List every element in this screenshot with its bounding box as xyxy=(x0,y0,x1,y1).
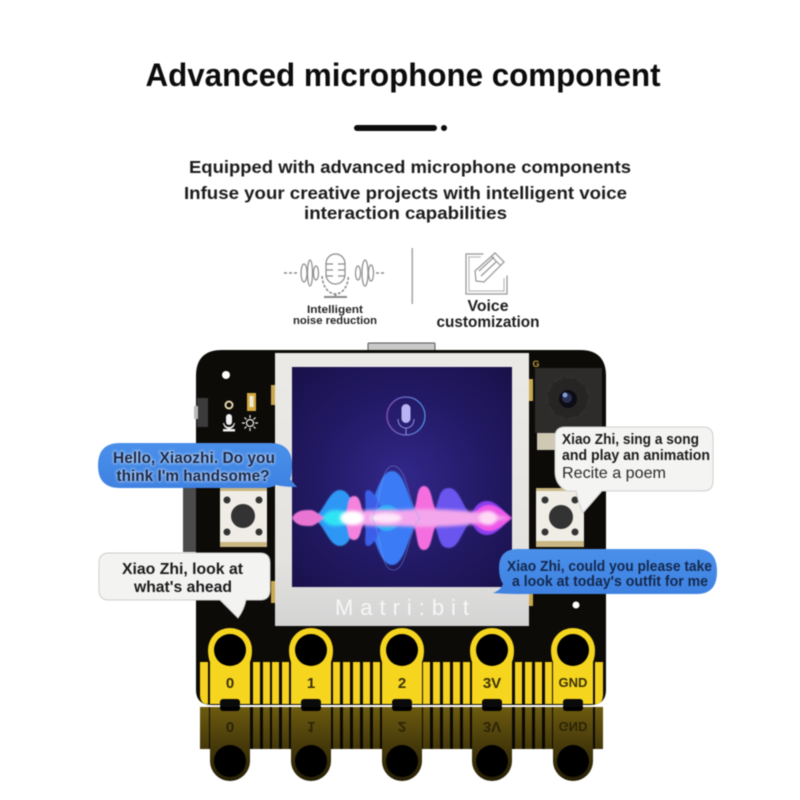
pin 1: 1 xyxy=(307,675,315,692)
pin 3V xyxy=(470,628,514,707)
side switch xyxy=(194,398,208,427)
wave glow core xyxy=(322,509,510,527)
label: voice customization xyxy=(436,298,540,331)
icon divider xyxy=(412,248,413,304)
speech bubble: todays outfit: Xiao Zhi, could you please take xyxy=(507,559,712,575)
label: voice customization: Voice xyxy=(468,298,509,315)
silk G mark: G xyxy=(532,359,540,369)
gold edge tabs xyxy=(271,379,533,606)
mounting hole bottom right xyxy=(572,602,580,608)
icon: voice customization pencil xyxy=(466,253,507,294)
label: voice customization: customization xyxy=(436,314,540,331)
speech bubble: todays outfit: a look at today's outfit for me xyxy=(512,574,708,590)
microbit board xyxy=(183,343,606,707)
pin 3V: 3V xyxy=(483,675,501,692)
sound wave lobes xyxy=(292,471,512,565)
speech bubble: Hello Xiaozhi: think I'm handsome? xyxy=(116,468,270,485)
left push button xyxy=(220,488,267,547)
speech bubble: sing a song xyxy=(555,427,713,513)
mounting hole top left xyxy=(222,371,230,379)
speech bubble: todays outfit xyxy=(493,549,717,594)
speech bubble: Hello Xiaozhi xyxy=(98,443,297,488)
speech bubble: look ahead: Xiao Zhi, look at xyxy=(122,561,243,578)
pin 2 xyxy=(380,628,424,707)
board reflection: 1 xyxy=(307,718,315,735)
board reflection: 3V xyxy=(483,718,501,735)
speech bubble: sing a song: Xiao Zhi, sing a song xyxy=(562,432,699,448)
pin GND xyxy=(551,628,595,707)
board reflection xyxy=(200,704,603,781)
icon: screen microphone xyxy=(387,397,425,435)
left side shadow strip xyxy=(183,488,198,552)
label: intelligent noise reduction: noise reduction xyxy=(293,315,377,327)
intro text: interaction capabilities xyxy=(304,203,507,223)
pcb body xyxy=(196,350,606,705)
intro text: Infuse your creative projects with intelligent voice xyxy=(184,183,627,203)
wave outline strokes xyxy=(372,466,420,570)
board reflection: 2 xyxy=(398,718,406,735)
speech bubble: sing a song: Recite a poem xyxy=(562,465,666,482)
screen frame xyxy=(275,353,529,626)
icon: microphone with noise reduction xyxy=(284,254,384,297)
speech bubble: Hello Xiaozhi: think I'm handsome? xyxy=(116,468,270,485)
intro text xyxy=(184,157,631,223)
title underline ornament xyxy=(354,125,447,131)
camera module xyxy=(535,368,602,433)
pin 0 xyxy=(208,628,252,707)
light sensor component xyxy=(247,393,256,411)
camera ribbon xyxy=(537,433,557,450)
speech bubble: Hello Xiaozhi: Hello, Xiaozhi. Do you xyxy=(113,450,275,467)
pin 0: 0 xyxy=(226,675,234,692)
icon: board sun xyxy=(242,415,258,431)
speech bubble: sing a song: and play an animation xyxy=(562,448,710,464)
icon: status ring xyxy=(226,402,232,408)
speech bubble: look ahead xyxy=(99,553,270,618)
pin 2: 2 xyxy=(398,675,406,692)
board reflection: GND xyxy=(559,719,587,734)
usb connector xyxy=(368,343,435,353)
edge connector stripes xyxy=(200,662,603,704)
speech bubble: Hello Xiaozhi: Hello, Xiaozhi. Do you xyxy=(113,450,275,467)
board reflection: 0 xyxy=(226,718,234,735)
speech bubble: look ahead: what's ahead xyxy=(133,579,232,596)
title: Advanced microphone component xyxy=(146,57,661,93)
intro text: Equipped with advanced microphone components xyxy=(189,157,631,177)
pin GND: GND xyxy=(559,675,587,690)
pin 1 xyxy=(289,628,333,707)
right push button xyxy=(536,488,584,547)
voice assistant screen xyxy=(292,367,512,587)
brand text: Matri:bit xyxy=(335,595,469,620)
icon: board microphone xyxy=(223,414,235,432)
label: intelligent noise reduction: Intelligent xyxy=(307,304,363,316)
label: intelligent noise reduction xyxy=(293,304,377,327)
